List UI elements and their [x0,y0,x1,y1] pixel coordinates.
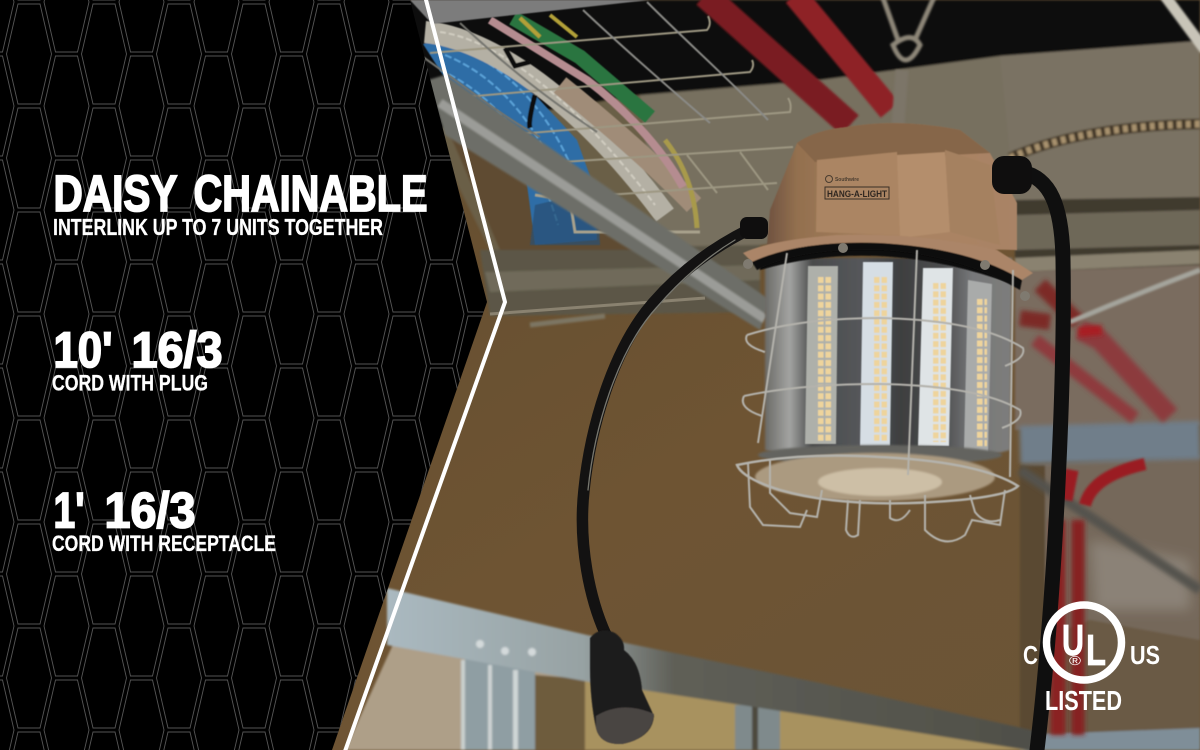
black hexagon panel [0,0,487,750]
light strips on lower duct [490,298,1200,590]
feature: one foot cord: CORD WITH RECEPTACLE [52,531,276,556]
feature: one foot cord: 16/3 [104,482,196,538]
hexagon pattern [0,0,487,750]
galvanized pipe [428,75,770,330]
feature: ten foot cord: 10' [54,322,112,378]
UL listed mark: U [1062,616,1084,665]
cage bolts [743,243,1030,301]
white chevron line [344,0,505,750]
feature: daisy chainable [53,165,428,240]
flexible conduit [1010,0,1200,322]
lens disc [755,445,1002,501]
feature: one foot cord: 1' [54,482,84,538]
cable bundles [423,15,697,245]
LED cylinder [765,258,1012,468]
feature: ten foot cord: 16/3 [132,322,222,378]
left and right strain reliefs [740,156,1032,239]
work light [737,0,1033,541]
UL listed mark: ® [1069,653,1082,668]
product logo on dome: HANG-A-LIGHT [827,189,887,200]
feature: daisy chainable: CHAINABLE [194,165,428,222]
long black cord with receptacle [582,172,1063,750]
ceiling and upper wall [400,0,1200,750]
UL listed mark: L [1086,626,1106,675]
feature: ten foot cord: CORD WITH PLUG [52,370,208,396]
UL listed mark: US [1130,640,1160,670]
receptacle plug [590,630,654,744]
red pipes [705,0,1170,735]
UL listed mark: LISTED [1045,685,1122,716]
feature: one foot cord [52,482,276,556]
feature: daisy chainable: INTERLINK UP TO 7 UNITS TOGETHER [53,214,383,240]
product logo on dome [825,176,889,200]
product logo on dome: Southwire [835,177,859,183]
feature: ten foot cord [52,322,222,396]
lower beam and openings [345,588,1040,750]
UL listed mark: C [1023,640,1038,670]
tan dome housing [743,123,1033,290]
LED panels [760,241,1015,454]
wire tray [410,0,793,232]
feature: daisy chainable: DAISY [54,165,178,222]
hanging hook [882,0,935,125]
UL listed mark [1023,605,1160,716]
wire cage [737,250,1023,541]
